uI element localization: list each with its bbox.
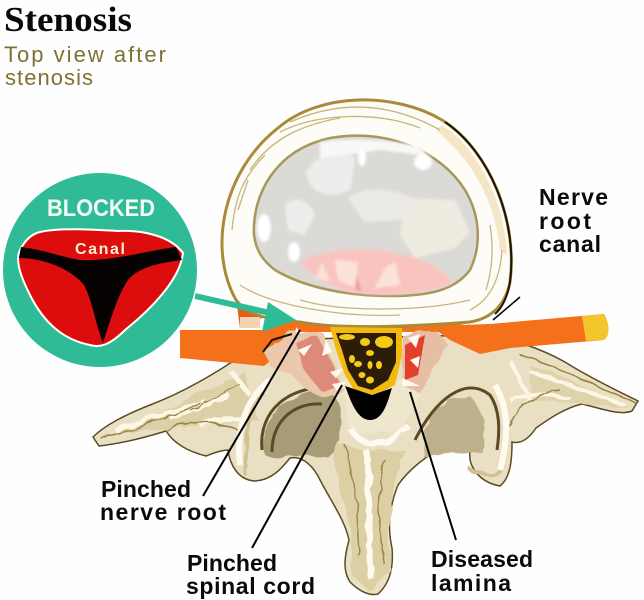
left nerve root [180,298,470,366]
vertebral disc [222,100,511,327]
diseased lamina right [402,330,448,392]
subtitle: Top view after [4,42,166,67]
spinal cord [330,327,402,420]
disc nucleus [254,136,478,296]
arrow to canal [195,296,296,332]
canal label: Canal [75,241,125,258]
diseased lamina left [263,332,346,398]
blocked canal circle [3,173,197,367]
subtitle: stenosis [5,65,93,90]
label: nerve root canal: root [539,208,591,234]
title: Stenosis [4,0,132,39]
label: nerve root canal: Nerve [539,184,608,210]
label: diseased lamina: Diseased [431,546,533,572]
spinous process [330,425,408,590]
label: diseased lamina: lamina [431,570,511,596]
label: pinched nerve root: nerve root [100,499,226,525]
canal cross-section [18,229,183,346]
label: nerve root canal: canal [539,231,601,257]
right nerve root [430,314,608,354]
label: pinched nerve root [100,476,226,525]
leader lines [203,297,520,548]
vertebra bone [93,335,638,594]
label: pinched spinal cord [186,550,315,599]
label: diseased lamina [431,546,533,596]
label: pinched nerve root: Pinched [101,476,191,502]
right foramen arch [415,385,506,470]
left foramen arch [239,380,341,465]
spinal cord nerve spots [339,334,393,384]
label: pinched spinal cord: Pinched [187,550,277,576]
blocked label: BLOCKED [47,195,155,222]
label: pinched spinal cord: spinal cord [186,573,315,599]
label: nerve root canal [539,184,608,257]
subtitle [4,42,166,90]
